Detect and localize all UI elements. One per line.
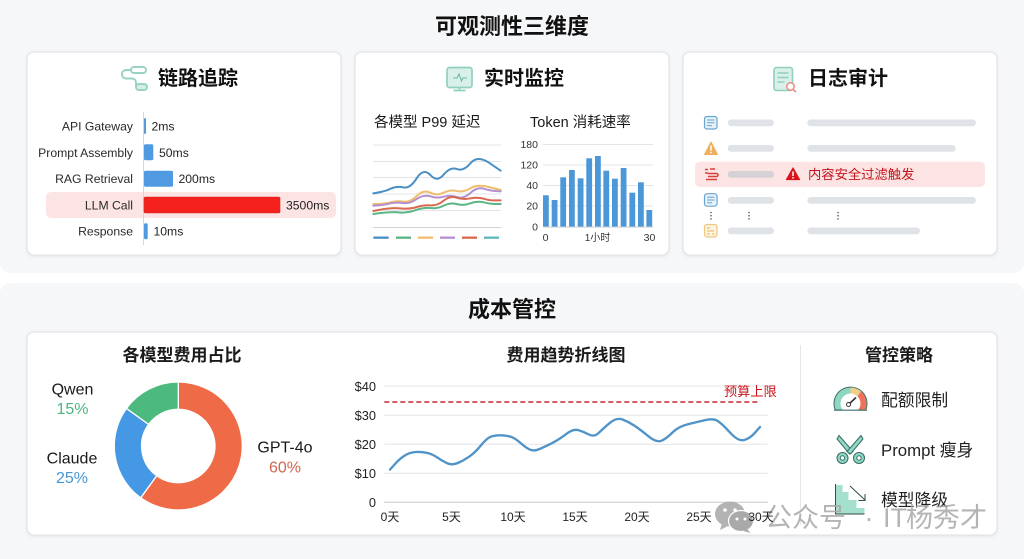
panel: observability background	[0, 0, 1024, 273]
bar chart: token rate: 20	[526, 200, 538, 212]
icon: gauge	[834, 387, 867, 410]
line chart: cost trend: $10	[355, 466, 376, 481]
strategies list: 模型降级	[881, 491, 948, 510]
waterfall chart: 200ms	[178, 172, 215, 186]
waterfall chart: Prompt Assembly	[38, 146, 134, 160]
donut chart: cost share: 25%	[56, 470, 88, 487]
line chart: cost trend: $20	[355, 437, 376, 452]
icon: monitor	[447, 68, 472, 90]
line chart: cost trend: 5天	[442, 510, 461, 524]
line chart: cost trend: 10天	[500, 510, 526, 524]
waterfall chart: Response	[78, 224, 133, 238]
panel: cost control card	[27, 332, 997, 535]
donut chart: cost share: 60%	[269, 460, 301, 476]
line chart: cost trend: 0	[369, 495, 376, 510]
heading: log audit: 日志审计	[808, 66, 888, 90]
highlight band: content filter	[695, 162, 985, 187]
waterfall chart: RAG Retrieval	[55, 172, 133, 186]
bar chart: token rate	[520, 114, 655, 244]
title: observability: 可观测性三维度	[435, 14, 589, 39]
watermark: WeChat account: IT	[883, 503, 907, 533]
panel: realtime monitoring	[355, 52, 669, 255]
line chart: cost trend: 费用趋势折线图	[506, 346, 626, 365]
waterfall chart: 3500ms	[286, 198, 329, 212]
panel: tracing	[27, 52, 341, 255]
log rows	[704, 116, 976, 237]
waterfall chart: 10ms	[154, 224, 183, 238]
watermark: WeChat account: 公众号	[765, 503, 846, 533]
strategies list: 管控策略	[865, 345, 933, 365]
line chart: cost trend: $40	[355, 379, 376, 394]
heading: monitoring: 实时监控	[484, 66, 564, 90]
line chart: cost trend: 25天	[686, 510, 712, 524]
donut chart: cost share: Qwen	[52, 382, 93, 398]
line chart: cost trend	[355, 346, 777, 524]
waterfall chart: API Gateway	[62, 120, 134, 134]
strategies list	[834, 345, 973, 514]
bar chart: token rate: 180	[520, 139, 538, 151]
donut chart: cost share: 各模型费用占比	[122, 345, 242, 365]
line chart: cost trend: $30	[355, 408, 376, 423]
bar chart: token rate: Token 消耗速率	[530, 114, 631, 131]
line chart: P99 latency: 各模型 P99 延迟	[374, 114, 480, 131]
line chart: cost trend: 15天	[562, 510, 588, 524]
bar chart: token rate: 120	[520, 160, 538, 172]
heading: tracing: 链路追踪	[158, 66, 238, 90]
title: cost control: 成本管控	[468, 297, 556, 322]
icon: trace flow	[122, 67, 147, 90]
line chart: cost trend: 0天	[381, 510, 399, 524]
bar chart: token rate: 0	[543, 232, 549, 244]
alert: content safety: 内容安全过滤触发	[808, 166, 914, 182]
panel: cost background	[0, 283, 1024, 559]
waterfall chart	[38, 112, 329, 245]
line chart: cost trend: 20天	[624, 510, 650, 524]
waterfall chart: 50ms	[159, 146, 189, 160]
line chart: P99 latency	[373, 114, 501, 238]
bar chart: token rate: 40	[526, 180, 538, 192]
icon: stairs down	[836, 484, 865, 514]
highlight band: LLM Call	[46, 192, 336, 218]
bar chart: token rate: 30	[644, 232, 655, 244]
donut chart: cost share: GPT-4o	[257, 440, 313, 456]
donut chart: cost share: Claude	[47, 450, 97, 468]
waterfall chart: LLM Call	[85, 198, 133, 212]
donut chart: cost share	[47, 345, 313, 510]
watermark: WeChat account: 杨秀才	[906, 503, 987, 533]
strategies list: Prompt 瘦身	[881, 441, 973, 460]
strategies list: 配额限制	[881, 391, 948, 410]
donut chart: cost share: 15%	[56, 401, 89, 418]
panel: log audit	[683, 52, 997, 255]
waterfall chart: 2ms	[152, 120, 175, 134]
watermark: WeChat account: ·	[857, 503, 881, 533]
icon: WeChat	[715, 502, 754, 533]
icon: log search	[774, 68, 796, 92]
bar chart: token rate: 1小时	[585, 232, 610, 244]
watermark: WeChat account	[715, 502, 987, 533]
line chart: cost trend: 预算上限	[724, 384, 777, 399]
icon: scissors	[837, 436, 864, 464]
legend: model colour dashes	[373, 234, 499, 241]
x axis label: day 30: 30天	[748, 510, 774, 524]
bar chart: token rate: 0	[532, 222, 538, 234]
